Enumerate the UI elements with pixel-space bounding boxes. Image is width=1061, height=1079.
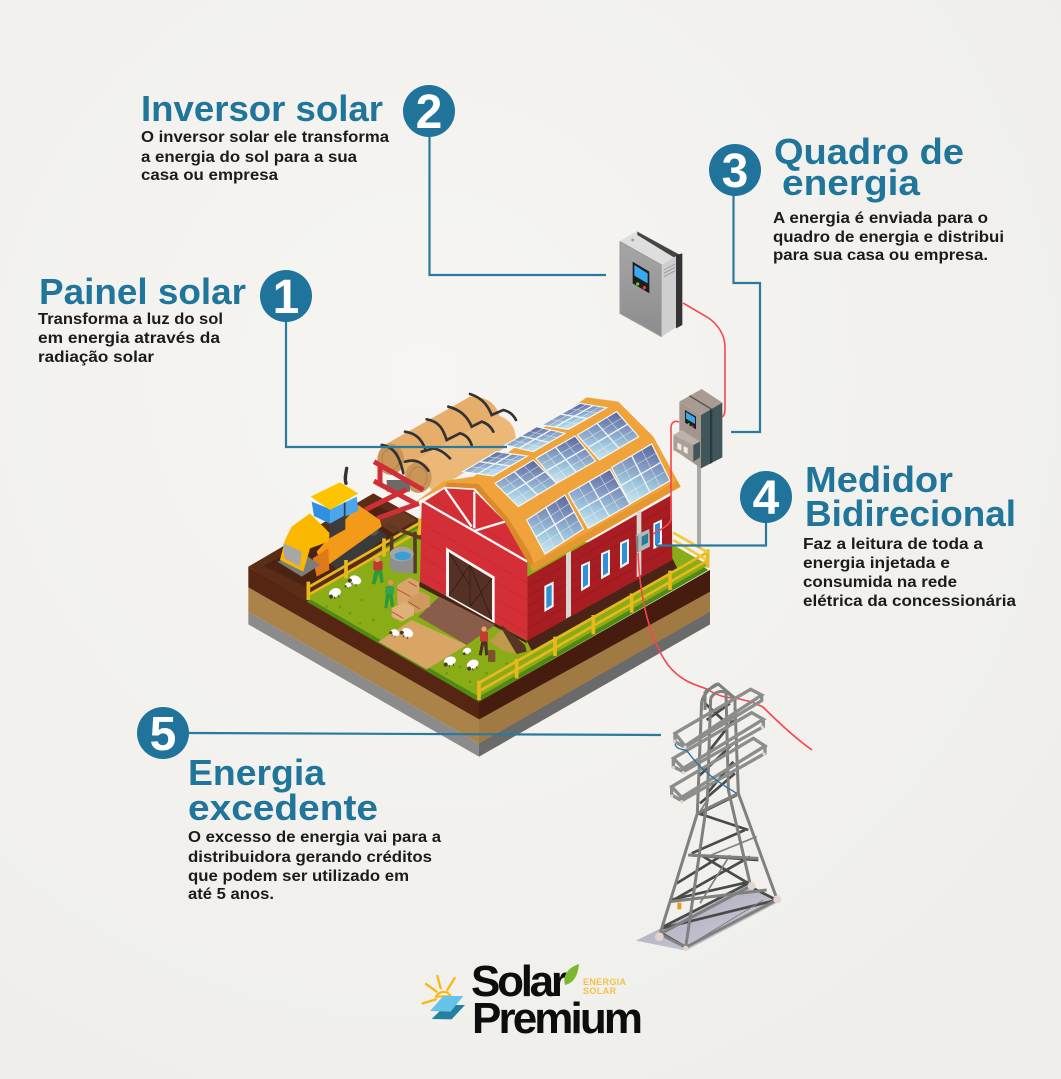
text 1: radiação solar — [38, 349, 154, 366]
badge 5: 5 — [150, 708, 176, 761]
logo wordmark: Solar — [471, 957, 568, 1006]
text 5: até 5 anos. — [188, 886, 274, 903]
grass yard — [307, 523, 708, 702]
text 2: casa ou empresa — [141, 167, 278, 184]
heading 4 — [805, 459, 1016, 534]
text 4: energia injetada e — [803, 555, 950, 572]
transmission tower — [636, 684, 781, 951]
logo wordmark — [471, 957, 643, 1043]
small worker — [677, 903, 681, 909]
callout 1: painel solar — [38, 270, 507, 447]
text 2: a energia do sol para a sua — [141, 149, 357, 166]
text 3: quadro de energia e distribui — [773, 229, 1004, 246]
badge 3 — [709, 144, 761, 198]
callout 5: energia excedente — [137, 707, 661, 903]
heading 4: Bidirecional — [805, 493, 1016, 534]
barn door — [446, 547, 495, 623]
callout 2: inversor solar — [141, 85, 606, 275]
badge 4: 4 — [753, 472, 780, 525]
legs and frame — [660, 684, 777, 947]
dirt path — [378, 620, 467, 669]
text 2 — [141, 129, 389, 184]
connector 3 — [731, 196, 760, 432]
text 1: em energia através da — [38, 330, 220, 347]
power distribution board — [673, 389, 722, 468]
connector 4 — [656, 523, 766, 546]
badge 3: 3 — [722, 145, 748, 198]
ground block — [248, 493, 710, 757]
text 4: consumida na rede — [803, 574, 957, 591]
heading 5: Energia — [188, 752, 326, 793]
logo tagline — [583, 977, 626, 996]
solar panels — [463, 403, 670, 554]
text 4: Faz a leitura de toda a — [803, 536, 983, 553]
logo: Solar Premium — [423, 957, 643, 1043]
badge 1: 1 — [273, 271, 299, 324]
windows — [544, 519, 662, 612]
text 5: distribuidora gerando créditos — [188, 849, 432, 866]
connector 2 — [430, 137, 606, 275]
heading 3: Quadro de — [774, 131, 964, 172]
text 3: A energia é enviada para o — [773, 210, 988, 227]
side wall — [527, 495, 672, 641]
logo leaf — [564, 964, 579, 985]
badge 2: 2 — [416, 86, 442, 139]
text 4 — [803, 536, 1016, 610]
heading 2: Inversor solar — [141, 88, 383, 129]
heading 5: excedente — [188, 787, 378, 828]
roof — [415, 397, 681, 572]
bracing — [660, 703, 777, 947]
gable trim — [422, 488, 527, 562]
water well — [387, 525, 422, 573]
text 1 — [38, 311, 223, 366]
badge 5 — [137, 707, 189, 761]
illustration: isometric farm — [248, 394, 710, 757]
barn — [415, 397, 681, 651]
connector wires — [638, 303, 812, 750]
electric meter — [636, 529, 650, 553]
cardboard boxes — [392, 577, 430, 622]
power board pole — [697, 466, 701, 548]
badge 2 — [403, 85, 455, 139]
callout 4: medidor bidirecional — [656, 459, 1016, 610]
tower shadow — [636, 885, 779, 951]
hay bales — [377, 394, 516, 493]
text 5: que podem ser utilizado em — [188, 868, 409, 885]
heading 4: Medidor — [805, 459, 953, 500]
gable wall — [420, 488, 527, 641]
tractor — [277, 468, 387, 577]
text 3 — [773, 210, 1004, 264]
left fence — [308, 518, 422, 600]
wall pillars — [566, 510, 641, 619]
callout 3: quadro de energia — [709, 131, 1004, 432]
firewood and hay pile — [489, 625, 527, 654]
farmers — [372, 557, 495, 662]
tower arms — [672, 689, 765, 801]
heading 5 — [188, 752, 378, 828]
heading 3 — [774, 131, 964, 203]
sheep flock — [327, 574, 481, 673]
heading 1: Painel solar — [39, 271, 246, 312]
red trailer hitch — [365, 462, 423, 518]
logo tagline: ENERGIA — [583, 977, 626, 987]
text 1: Transforma a luz do sol — [38, 311, 223, 328]
logo tagline: SOLAR — [583, 986, 616, 996]
connector 5 — [189, 733, 661, 735]
logo icon — [423, 976, 465, 1019]
text 2: O inversor solar ele transforma — [141, 129, 389, 146]
text 5 — [188, 829, 441, 903]
foundation — [527, 558, 677, 651]
text 3: para sua casa ou empresa. — [773, 247, 988, 264]
text 5: O excesso de energia vai para a — [188, 829, 441, 846]
blue wire — [675, 744, 737, 793]
badge 1 — [260, 270, 312, 324]
insulators — [655, 726, 781, 951]
front fence — [478, 533, 708, 700]
heading 3: energia — [782, 162, 921, 203]
ramp — [418, 597, 495, 645]
text 4: elétrica da concessionária — [803, 593, 1016, 610]
logo wordmark: Premium — [472, 994, 643, 1043]
connector 1 — [286, 322, 507, 447]
badge 4 — [740, 471, 792, 525]
inverter device — [620, 232, 682, 337]
